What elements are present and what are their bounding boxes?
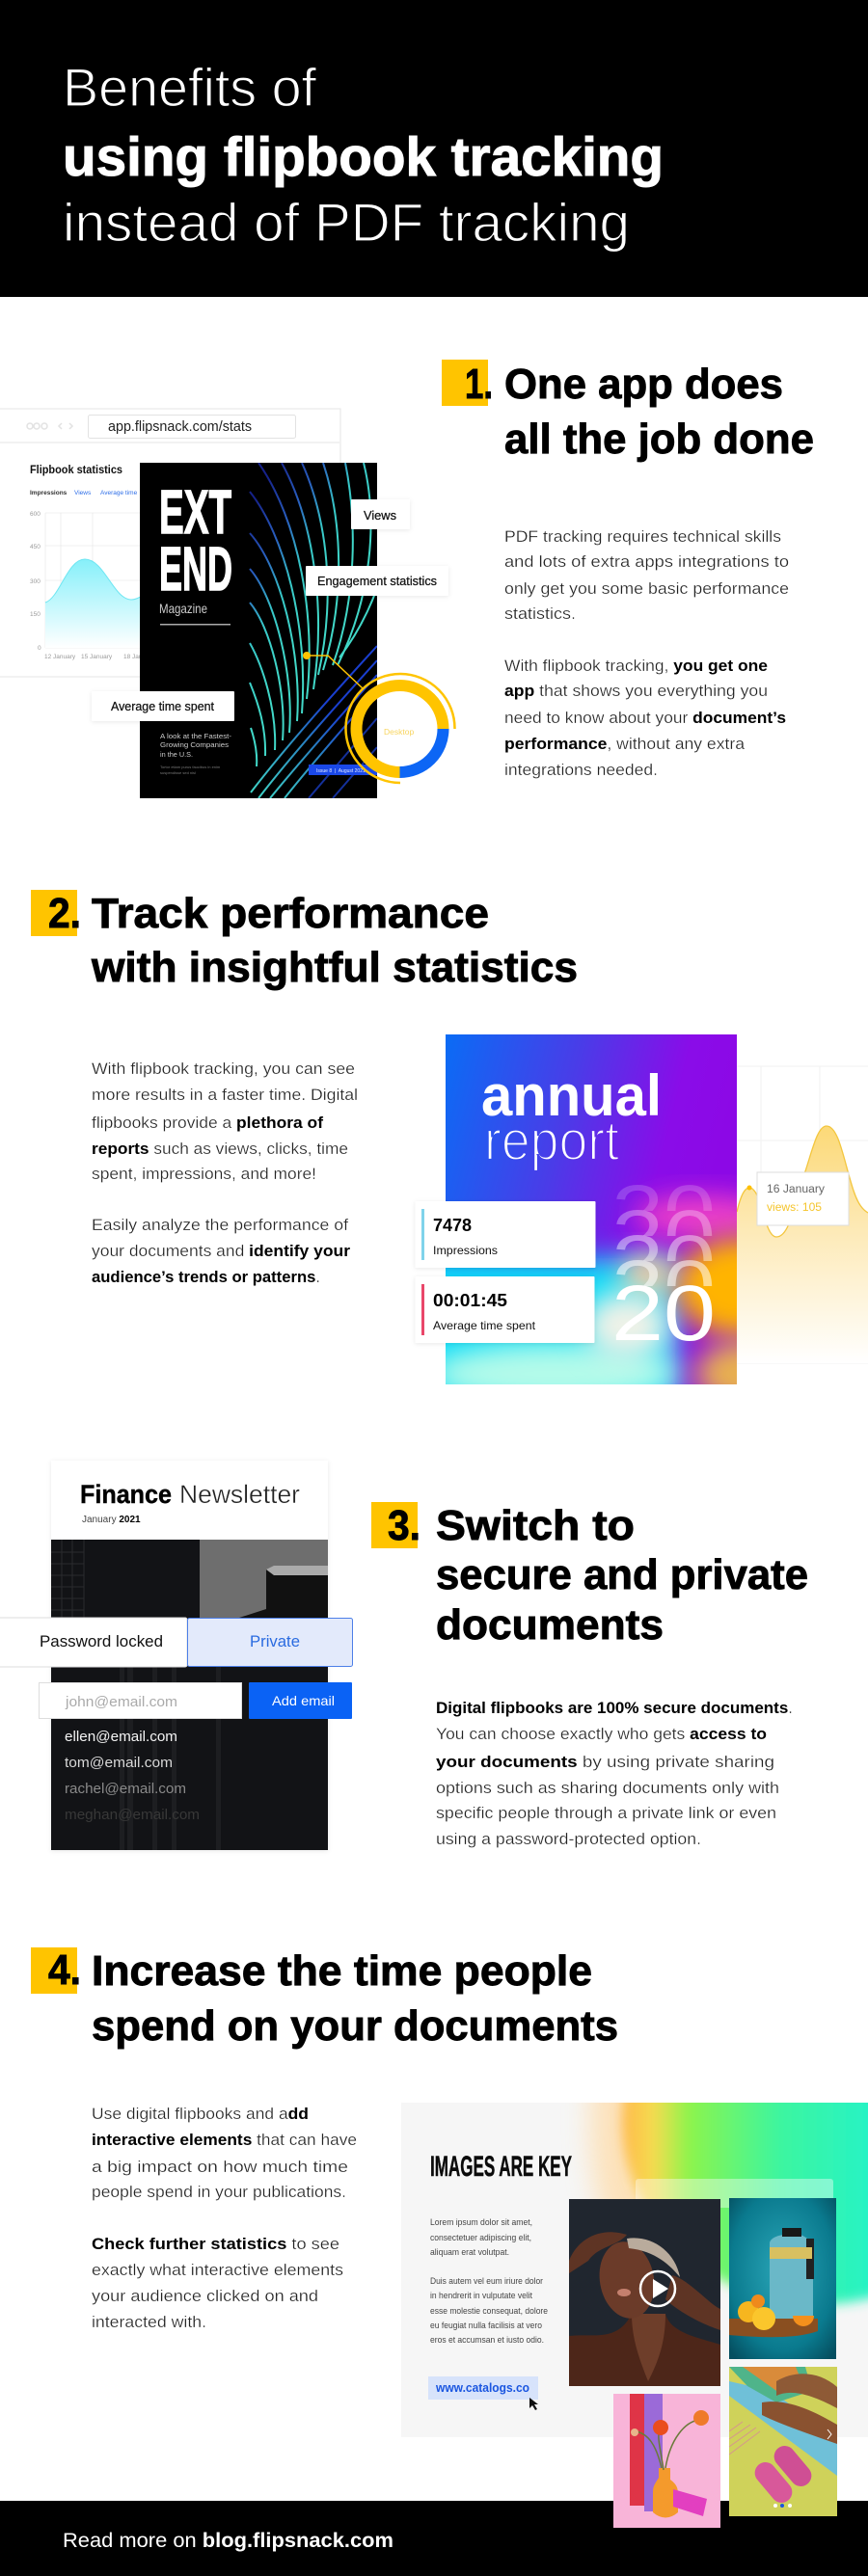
magazine cover: EXTEND: suspendisse sed nisl	[160, 770, 196, 775]
magazine cover: EXTEND: Magazine	[159, 601, 207, 616]
catalog spread panel: consectetuer adipiscing elit,	[430, 2233, 531, 2243]
browser stats window: Views	[74, 490, 92, 496]
magazine cover: EXTEND: END	[159, 534, 232, 604]
icon: play button	[640, 2271, 675, 2306]
section 1 body text: PDF tracking requires technical skills	[504, 528, 781, 546]
section 1 heading	[504, 361, 814, 463]
annual report cover: 20	[611, 1220, 716, 1307]
section 4 body text: your audience clicked on and	[92, 2288, 318, 2305]
section 4 heading	[92, 1947, 618, 2050]
section 3 heading	[436, 1502, 808, 1649]
chart tooltip: 16 January	[767, 1184, 825, 1195]
section 2 body text: audience’s trends or patterns.	[92, 1269, 320, 1286]
section 4 heading: Increase the time people	[92, 1947, 592, 1995]
section 3 body text: Digital flipbooks are 100% secure documents .	[436, 1700, 793, 1717]
section 1 body text: integrations needed.	[504, 762, 658, 779]
catalog spread panel: Duis autem vel eum iriure dolor	[430, 2276, 543, 2287]
section 1 body text: statistics.	[504, 605, 576, 623]
section 2 body text: Easily analyze the performance of	[92, 1217, 348, 1234]
email input and add button	[39, 1682, 352, 1719]
section 2 body text: your documents and identify your	[92, 1243, 351, 1260]
section 1 body text: only get you some basic performance	[504, 580, 789, 598]
section 3 heading: secure and private	[436, 1551, 808, 1598]
section 4 body text: interacted with.	[92, 2314, 206, 2331]
password and private toggle: Password locked	[40, 1633, 163, 1650]
browser stats window: 15 January	[81, 654, 113, 660]
annual report cover: 20	[611, 1169, 716, 1257]
section 4 number badge	[31, 1946, 81, 1994]
impressions stat card: Impressions	[433, 1244, 498, 1257]
chart tooltip	[746, 1172, 849, 1225]
photo: water bottle and oranges	[729, 2198, 836, 2359]
section 4 body text: Check further statistics to see	[92, 2236, 339, 2253]
section 2 body text: reports such as views, clicks, time	[92, 1140, 348, 1158]
section 3 body text	[436, 1700, 793, 1848]
email list	[65, 1729, 200, 1823]
label: average time spent	[92, 691, 234, 721]
newsletter card	[51, 1461, 328, 1850]
section 1 body text: With flipbook tracking, you get one	[504, 657, 768, 675]
impressions stat card	[415, 1201, 596, 1268]
impressions stat card: 7478	[433, 1216, 472, 1235]
link highlight: www.catalogs.co	[435, 2380, 529, 2395]
section 3 body text: You can choose exactly who gets access to	[436, 1726, 767, 1743]
section 1 number badge	[442, 360, 493, 408]
section 2 heading: with insightful statistics	[91, 944, 578, 991]
section 1 number badge: 1.	[465, 361, 493, 408]
magazine cover: EXTEND	[140, 463, 377, 798]
section 2 number badge	[31, 890, 81, 937]
annual report cover: annual	[481, 1063, 662, 1128]
section 3 heading: documents	[436, 1601, 664, 1649]
section 4 body text: a big impact on how much time	[92, 2159, 348, 2176]
browser stats window: 150	[30, 611, 41, 618]
magazine cover: EXTEND: A look at the Fastest-	[160, 732, 232, 740]
browser stats window: 18 Jan	[123, 654, 143, 660]
section 2 body text: With flipbook tracking, you can see	[92, 1060, 355, 1078]
donut chart: desktop	[303, 652, 455, 783]
link highlight	[428, 2376, 538, 2400]
magazine cover: EXTEND: EXT	[159, 477, 231, 547]
catalog spread panel	[401, 2103, 868, 2437]
magazine cover: EXTEND: Growing Companies	[160, 740, 229, 749]
password and private toggle	[0, 1618, 353, 1667]
labels: views, engagement: Views	[364, 509, 396, 523]
section 2 body text	[92, 1060, 358, 1286]
yellow views chart	[737, 1066, 868, 1363]
section 4 heading: spend on your documents	[92, 2002, 618, 2050]
email list: ellen@email.com	[65, 1729, 177, 1745]
section 1 body text: and lots of extra apps integrations to	[504, 553, 789, 571]
catalog spread panel: IMAGES ARE KEY	[430, 2151, 572, 2183]
catalog spread panel: eu feugiat nulla facilisis at vero	[430, 2321, 542, 2331]
section 2 heading	[91, 890, 578, 991]
email input and add button: Add email	[272, 1693, 335, 1708]
catalog spread panel: esse molestie consequat, dolore	[430, 2306, 548, 2317]
browser stats window: Average time	[100, 490, 138, 496]
email list: rachel@email.com	[65, 1781, 186, 1797]
section 4 body text: Use digital flipbooks and a dd	[92, 2106, 309, 2123]
donut chart: desktop: Desktop	[384, 727, 414, 737]
footer band	[0, 2501, 868, 2576]
title: Benefits of	[63, 57, 316, 118]
section 1 heading: One app does	[504, 361, 783, 408]
email list: tom@email.com	[65, 1755, 173, 1771]
section 3 body text: options such as sharing documents only with	[436, 1780, 779, 1797]
catalog spread panel: eros et accumsan et iusto odio.	[430, 2335, 544, 2346]
section 1 body text: app that shows you everything you	[504, 683, 768, 700]
annual report cover: report	[484, 1110, 619, 1172]
average time stat card	[415, 1276, 594, 1343]
newsletter card: January 2021	[82, 1515, 141, 1525]
browser stats window: 0	[38, 645, 41, 652]
photo: sandals and striped towel	[729, 2367, 837, 2516]
section 3 body text: specific people through a private link or even	[436, 1805, 776, 1822]
labels: views, engagement	[306, 499, 448, 596]
browser stats window: 600	[30, 511, 41, 518]
section 4 body text	[92, 2106, 357, 2331]
labels: views, engagement: Engagement statistics	[317, 575, 437, 588]
section 1 body text	[504, 528, 789, 779]
section 2 heading: Track performance	[92, 890, 489, 937]
section 4 number badge: 4.	[48, 1946, 81, 1994]
section 2 body text: spent, impressions, and more!	[92, 1166, 316, 1183]
label: average time spent: Average time spent	[111, 700, 215, 713]
magazine cover: EXTEND: Tortor etiam purus faucibus in enim	[160, 765, 221, 769]
photo: pink vase	[613, 2394, 720, 2528]
photo: woman with play button	[569, 2199, 720, 2386]
section 3 body text: using a password-protected option.	[436, 1831, 701, 1848]
annual report cover	[446, 1034, 737, 1384]
password and private toggle: Private	[250, 1633, 300, 1650]
section 2 number badge: 2.	[48, 890, 81, 937]
annual report cover: 20	[611, 1245, 716, 1332]
catalog spread panel: Lorem ipsum dolor sit amet,	[430, 2217, 532, 2228]
annual report cover: 20	[611, 1194, 716, 1282]
browser stats window: app.flipsnack.com/stats	[108, 419, 252, 435]
cover line art	[250, 463, 377, 798]
issue tag: Issue 8 | August 2021	[316, 768, 366, 774]
section 4 body text: interactive elements that can have	[92, 2132, 357, 2149]
browser stats window	[0, 409, 340, 677]
section 1 body text: performance , without any extra	[504, 736, 746, 753]
section 3 number badge	[371, 1502, 420, 1549]
icon: cursor	[529, 2398, 538, 2410]
footer link: Read more on blog.flipsnack.com	[63, 2530, 393, 2552]
magazine cover: EXTEND: in the U.S.	[160, 750, 193, 759]
header band	[0, 0, 868, 297]
newsletter card: Newsletter	[179, 1480, 300, 1509]
section 4 body text: people spend in your publications.	[92, 2184, 346, 2201]
browser stats window: Flipbook statistics	[30, 465, 122, 476]
title	[63, 57, 664, 253]
email input and add button: john@email.com	[65, 1694, 177, 1710]
section 3 number badge: 3.	[388, 1502, 420, 1549]
section 2 body text: more results in a faster time. Digital	[92, 1087, 358, 1104]
newsletter card: Finance	[80, 1480, 172, 1509]
browser stats window: Impressions	[30, 490, 68, 496]
annual report cover: 20	[611, 1270, 716, 1357]
section 4 body text: exactly what interactive elements	[92, 2262, 343, 2279]
chart tooltip: views: 105	[767, 1202, 822, 1214]
browser stats window: 300	[30, 578, 41, 585]
title: using flipbook tracking	[63, 126, 664, 188]
section 3 heading: Switch to	[436, 1502, 635, 1549]
catalog spread panel: in hendrerit in vulputate velit	[430, 2291, 532, 2301]
section 2 body text: flipbooks provide a plethora of	[92, 1114, 324, 1132]
section 3 body text: your documents by using private sharing	[436, 1754, 774, 1771]
title: instead of PDF tracking	[63, 192, 630, 253]
catalog spread panel: aliquam erat volutpat.	[430, 2247, 509, 2258]
section 1 body text: need to know about your document’s	[504, 710, 786, 727]
email list: meghan@email.com	[65, 1807, 200, 1823]
section 1 heading: all the job done	[504, 416, 814, 463]
average time stat card: Average time spent	[433, 1319, 536, 1332]
average time stat card: 00:01:45	[433, 1291, 507, 1310]
browser stats window: 12 January	[44, 654, 76, 660]
browser stats window: 450	[30, 544, 41, 550]
issue tag	[309, 765, 377, 775]
